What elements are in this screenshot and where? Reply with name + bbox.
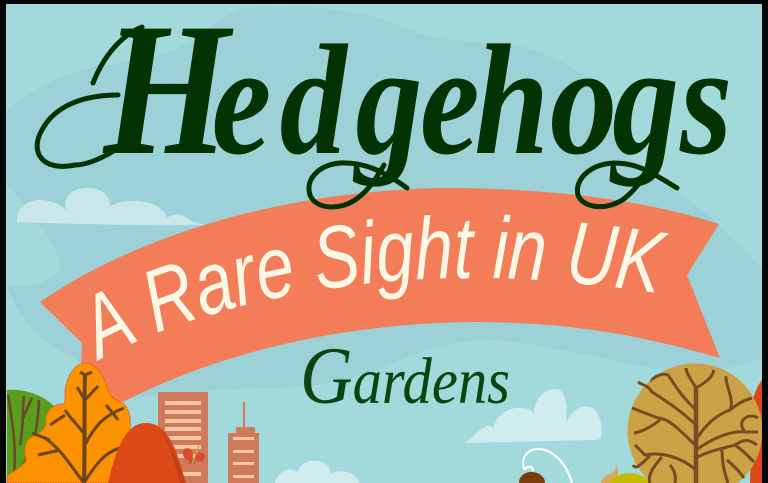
cloud: upper left: [17, 188, 205, 225]
tree: green: [7, 390, 56, 483]
tree: golden: [628, 363, 763, 483]
building: tower: [228, 402, 259, 483]
subtitle: Gardens: [300, 330, 510, 421]
tree: orange: [7, 363, 130, 483]
butterfly: [181, 445, 205, 464]
banner text: A Rare Sight in UK: [95, 214, 669, 361]
squirrel: [601, 464, 618, 483]
ribbon banner: [40, 188, 720, 402]
tree: red-orange right edge: [750, 380, 762, 483]
bush: yellow-green: [609, 473, 651, 483]
acorn on curl: [519, 449, 572, 483]
cloud: right: [465, 389, 601, 443]
building: tall: [158, 392, 208, 483]
cloud: bottom: [275, 460, 360, 483]
tree: red: [108, 423, 186, 483]
